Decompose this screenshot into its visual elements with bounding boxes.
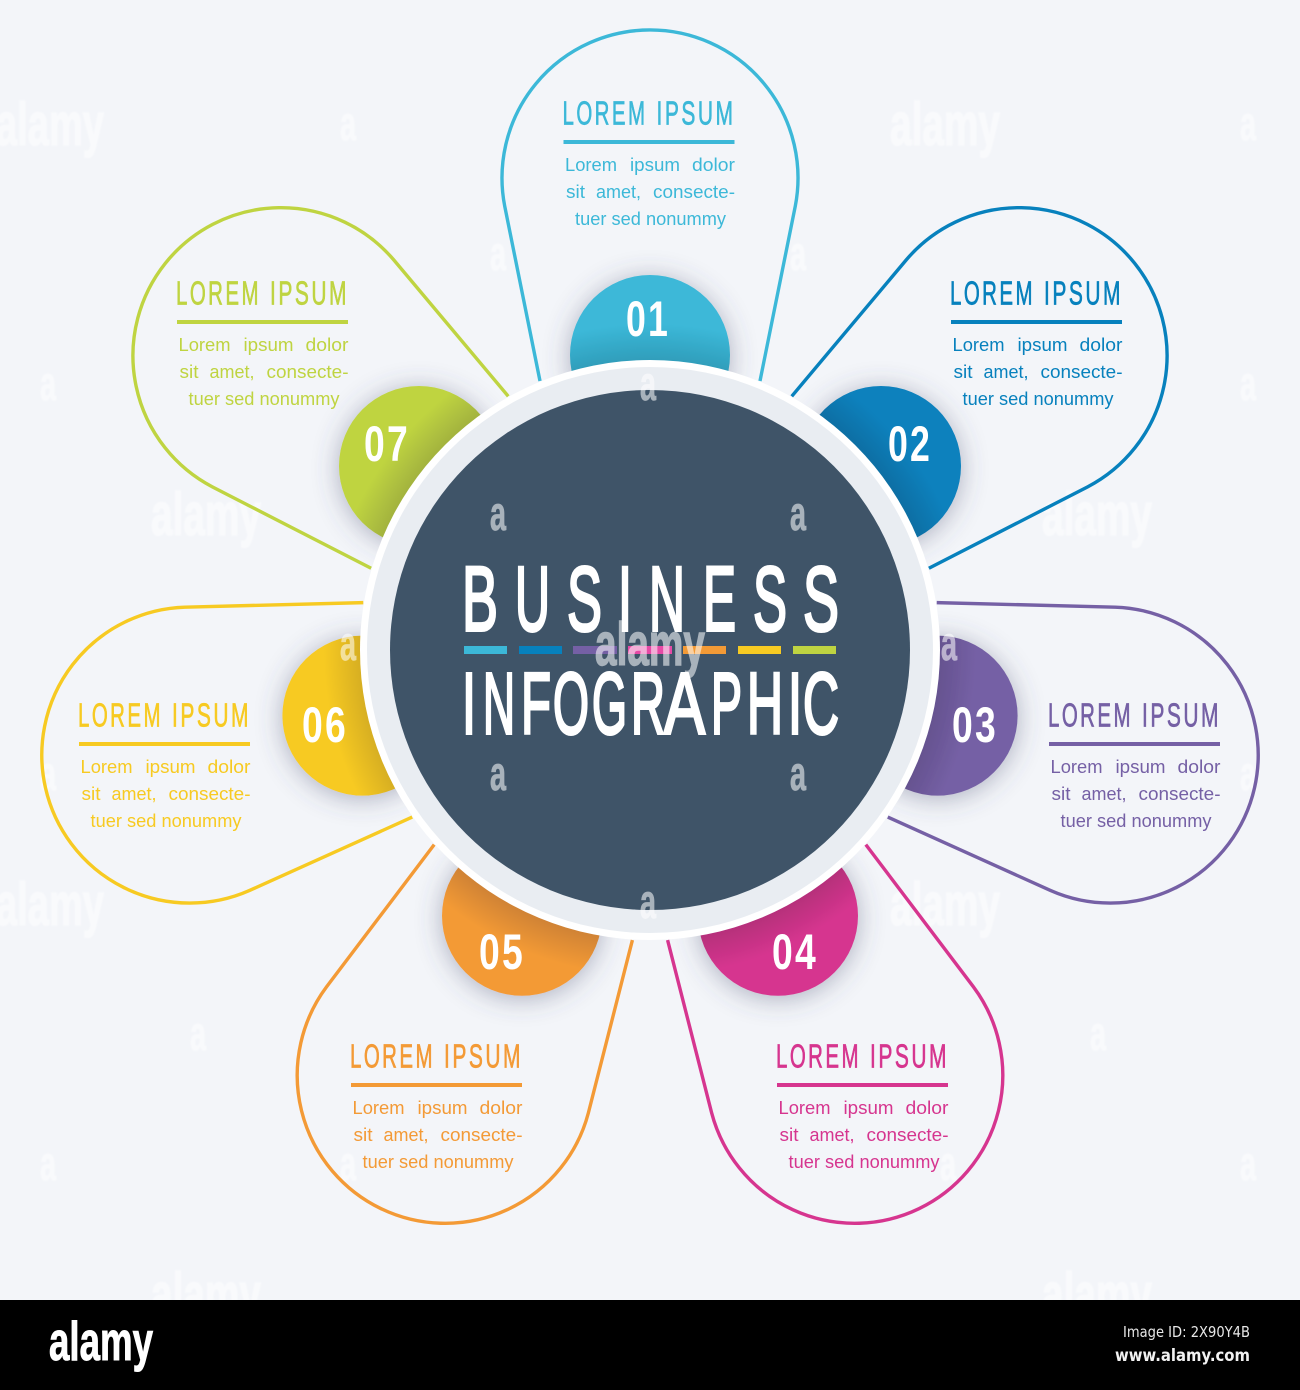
text block 05: dolor: [480, 1098, 522, 1118]
faint watermark pattern: a: [1240, 358, 1256, 411]
number 03: 03: [952, 697, 998, 753]
image id: Image ID: 2X90Y4B: [1123, 1323, 1250, 1341]
title: BUSINESS: S: [803, 548, 839, 650]
title: INFOGRAPHIC: P: [711, 656, 742, 752]
centre watermark: a: [340, 618, 356, 671]
faint watermark pattern: alamy: [151, 1261, 261, 1328]
text block 01: amet,: [596, 182, 641, 202]
text block 02: Lorem: [952, 335, 1004, 355]
text block 05: ipsum: [418, 1098, 468, 1118]
title: INFOGRAPHIC: O: [553, 656, 589, 752]
number circle 07: [339, 386, 499, 546]
text block 04: LOREM: [776, 1038, 861, 1076]
text block 01: tuer sed nonummy: [575, 209, 726, 229]
text block 04: ipsum: [844, 1098, 894, 1118]
panel 07: [73, 148, 532, 598]
text block 02: IPSUM: [1044, 276, 1123, 312]
text block 05: amet,: [384, 1125, 428, 1145]
centre watermark: a: [640, 358, 656, 411]
number circle 04: [698, 836, 858, 996]
text block 01: LOREM: [562, 96, 648, 132]
text block 05: LOREM: [350, 1038, 435, 1076]
text block 03: dolor: [1178, 757, 1220, 777]
centre watermark: a: [790, 488, 806, 541]
text block 04: sit: [780, 1125, 798, 1145]
text block 01: ipsum: [630, 155, 680, 175]
text block 04: consecte-: [866, 1125, 948, 1145]
number circle 06: [282, 636, 442, 796]
text block 07: consecte-: [266, 362, 348, 382]
panel 03: [858, 566, 1287, 932]
website: www.alamy.com: [1115, 1346, 1250, 1366]
text block 07: sit: [180, 362, 198, 382]
text block 03: LOREM: [1048, 698, 1133, 734]
text block 06: IPSUM: [172, 698, 251, 734]
text block 06: consecte-: [168, 784, 250, 804]
text block 07: ipsum: [244, 335, 294, 355]
faint watermark pattern: alamy: [0, 871, 104, 938]
text block 06: ipsum: [146, 757, 196, 777]
text block 02: ipsum: [1018, 335, 1068, 355]
faint watermark pattern: alamy: [151, 481, 261, 548]
text block 02: consecte-: [1040, 362, 1122, 382]
centre watermark: a: [790, 748, 806, 801]
centre watermark: alamy: [595, 611, 705, 678]
title: INFOGRAPHIC: N: [483, 656, 515, 752]
text block 02: [950, 276, 1123, 409]
faint watermark pattern: alamy: [1042, 481, 1152, 548]
text block 03: tuer sed nonummy: [1060, 811, 1212, 831]
text block 06: LOREM: [78, 698, 163, 734]
number 04: 04: [772, 924, 818, 980]
text block 06: [78, 698, 251, 831]
text block 01: dolor: [692, 155, 735, 175]
text block 07: dolor: [306, 335, 348, 355]
faint watermark pattern: a: [1240, 748, 1256, 801]
title: INFOGRAPHIC: [462, 656, 839, 752]
title: INFOGRAPHIC: I: [788, 656, 802, 752]
text block 07: IPSUM: [270, 276, 349, 312]
text block 04: [776, 1038, 949, 1172]
text block 01: consecte-: [653, 182, 735, 202]
text block 03: ipsum: [1116, 757, 1166, 777]
title: BUSINESS: N: [649, 548, 685, 650]
text block 07: Lorem: [178, 335, 230, 355]
text block 03: [1048, 698, 1221, 831]
faint watermark pattern: a: [190, 1008, 206, 1061]
petal outline 02: [768, 148, 1227, 598]
text block 05: consecte-: [440, 1125, 522, 1145]
title: INFOGRAPHIC: A: [664, 656, 705, 752]
panel 01: [502, 30, 798, 435]
text block 03: IPSUM: [1142, 698, 1221, 734]
faint watermark pattern: alamy: [1042, 1261, 1152, 1328]
faint watermark pattern: a: [490, 228, 506, 281]
text block 04: Lorem: [778, 1098, 830, 1118]
number 06: 06: [302, 697, 348, 753]
text block 06: sit: [82, 784, 100, 804]
text block 04: amet,: [810, 1125, 854, 1145]
text block 03: amet,: [1082, 784, 1126, 804]
faint watermark pattern: a: [340, 98, 356, 151]
text block 04: dolor: [906, 1098, 948, 1118]
text block 06: amet,: [112, 784, 156, 804]
text block 03: sit: [1052, 784, 1070, 804]
central hub: [360, 360, 940, 940]
title: BUSINESS: I: [618, 548, 632, 650]
text block 06: tuer sed nonummy: [90, 811, 242, 831]
number 07: 07: [364, 416, 410, 472]
title: BUSINESS: S: [753, 548, 787, 650]
number 02: 02: [888, 416, 932, 472]
centre watermark: [340, 358, 957, 929]
centre watermark: a: [490, 488, 506, 541]
title: BUSINESS: B: [462, 548, 498, 650]
panel 04: [633, 828, 1052, 1273]
text block 03: Lorem: [1050, 757, 1102, 777]
faint watermark pattern: alamy: [890, 871, 1000, 938]
text block 05: Lorem: [352, 1098, 404, 1118]
text block 06: dolor: [208, 757, 250, 777]
number circle 02: [801, 386, 961, 546]
faint watermark pattern: alamy: [0, 91, 104, 158]
panel 02: [768, 148, 1227, 598]
faint watermark pattern: alamy: [890, 91, 1000, 158]
faint watermark pattern: a: [340, 1138, 356, 1191]
text block 04: tuer sed nonummy: [788, 1152, 940, 1172]
number circle 03: [858, 636, 1018, 796]
text block 02: amet,: [984, 362, 1028, 382]
footer logo: alamy: [49, 1310, 153, 1372]
number circle 01: [570, 275, 730, 435]
petal outline 03: [879, 566, 1287, 932]
text block 02: sit: [954, 362, 972, 382]
petal outline 01: [502, 30, 798, 381]
footer bar: [0, 1300, 1300, 1390]
title: BUSINESS: S: [567, 548, 602, 650]
faint watermark pattern: a: [790, 228, 806, 281]
centre watermark: a: [640, 876, 656, 929]
text block 07: tuer sed nonummy: [188, 389, 340, 409]
centre watermark: a: [941, 618, 957, 671]
text block 02: LOREM: [950, 276, 1035, 312]
number circle 05: [442, 836, 602, 996]
text block 07: [176, 276, 349, 409]
petal outline 04: [633, 828, 1052, 1273]
colour divider bars: [464, 646, 836, 654]
panel 05: [248, 828, 667, 1273]
title: INFOGRAPHIC: C: [803, 656, 839, 752]
text block 01: [562, 96, 736, 229]
text block 05: IPSUM: [444, 1038, 523, 1076]
text block 04: IPSUM: [870, 1038, 949, 1076]
text block 01: IPSUM: [656, 96, 736, 132]
text block 01: Lorem: [565, 155, 617, 175]
title: INFOGRAPHIC: F: [521, 656, 551, 752]
title: INFOGRAPHIC: G: [592, 656, 627, 752]
text block 07: LOREM: [176, 276, 261, 312]
petal outline 07: [73, 148, 532, 598]
faint watermark pattern: a: [40, 748, 56, 801]
title: BUSINESS: E: [703, 548, 736, 650]
text block 05: [350, 1038, 523, 1172]
centre watermark: a: [490, 748, 506, 801]
petal outline 05: [248, 828, 667, 1273]
title: INFOGRAPHIC: I: [462, 656, 476, 752]
text block 05: sit: [354, 1125, 372, 1145]
faint watermark pattern: a: [1240, 98, 1256, 151]
text block 07: amet,: [210, 362, 254, 382]
title: BUSINESS: U: [515, 548, 550, 650]
text block 02: tuer sed nonummy: [962, 389, 1114, 409]
faint watermark pattern: a: [40, 358, 56, 411]
text block 05: tuer sed nonummy: [362, 1152, 514, 1172]
title: BUSINESS: [462, 548, 839, 650]
faint watermark pattern: a: [1240, 1138, 1256, 1191]
faint watermark pattern: a: [940, 1138, 956, 1191]
text block 03: consecte-: [1138, 784, 1220, 804]
faint watermark pattern: a: [40, 1138, 56, 1191]
number 01: 01: [626, 291, 670, 347]
text block 01: sit: [566, 182, 585, 202]
text block 06: Lorem: [80, 757, 132, 777]
panel 06: [13, 566, 442, 932]
faint watermark pattern: a: [1090, 1008, 1106, 1061]
title: INFOGRAPHIC: H: [747, 656, 783, 752]
petal outline 06: [13, 566, 421, 932]
title: INFOGRAPHIC: R: [631, 656, 665, 752]
text block 02: dolor: [1080, 335, 1122, 355]
number 05: 05: [479, 924, 525, 980]
